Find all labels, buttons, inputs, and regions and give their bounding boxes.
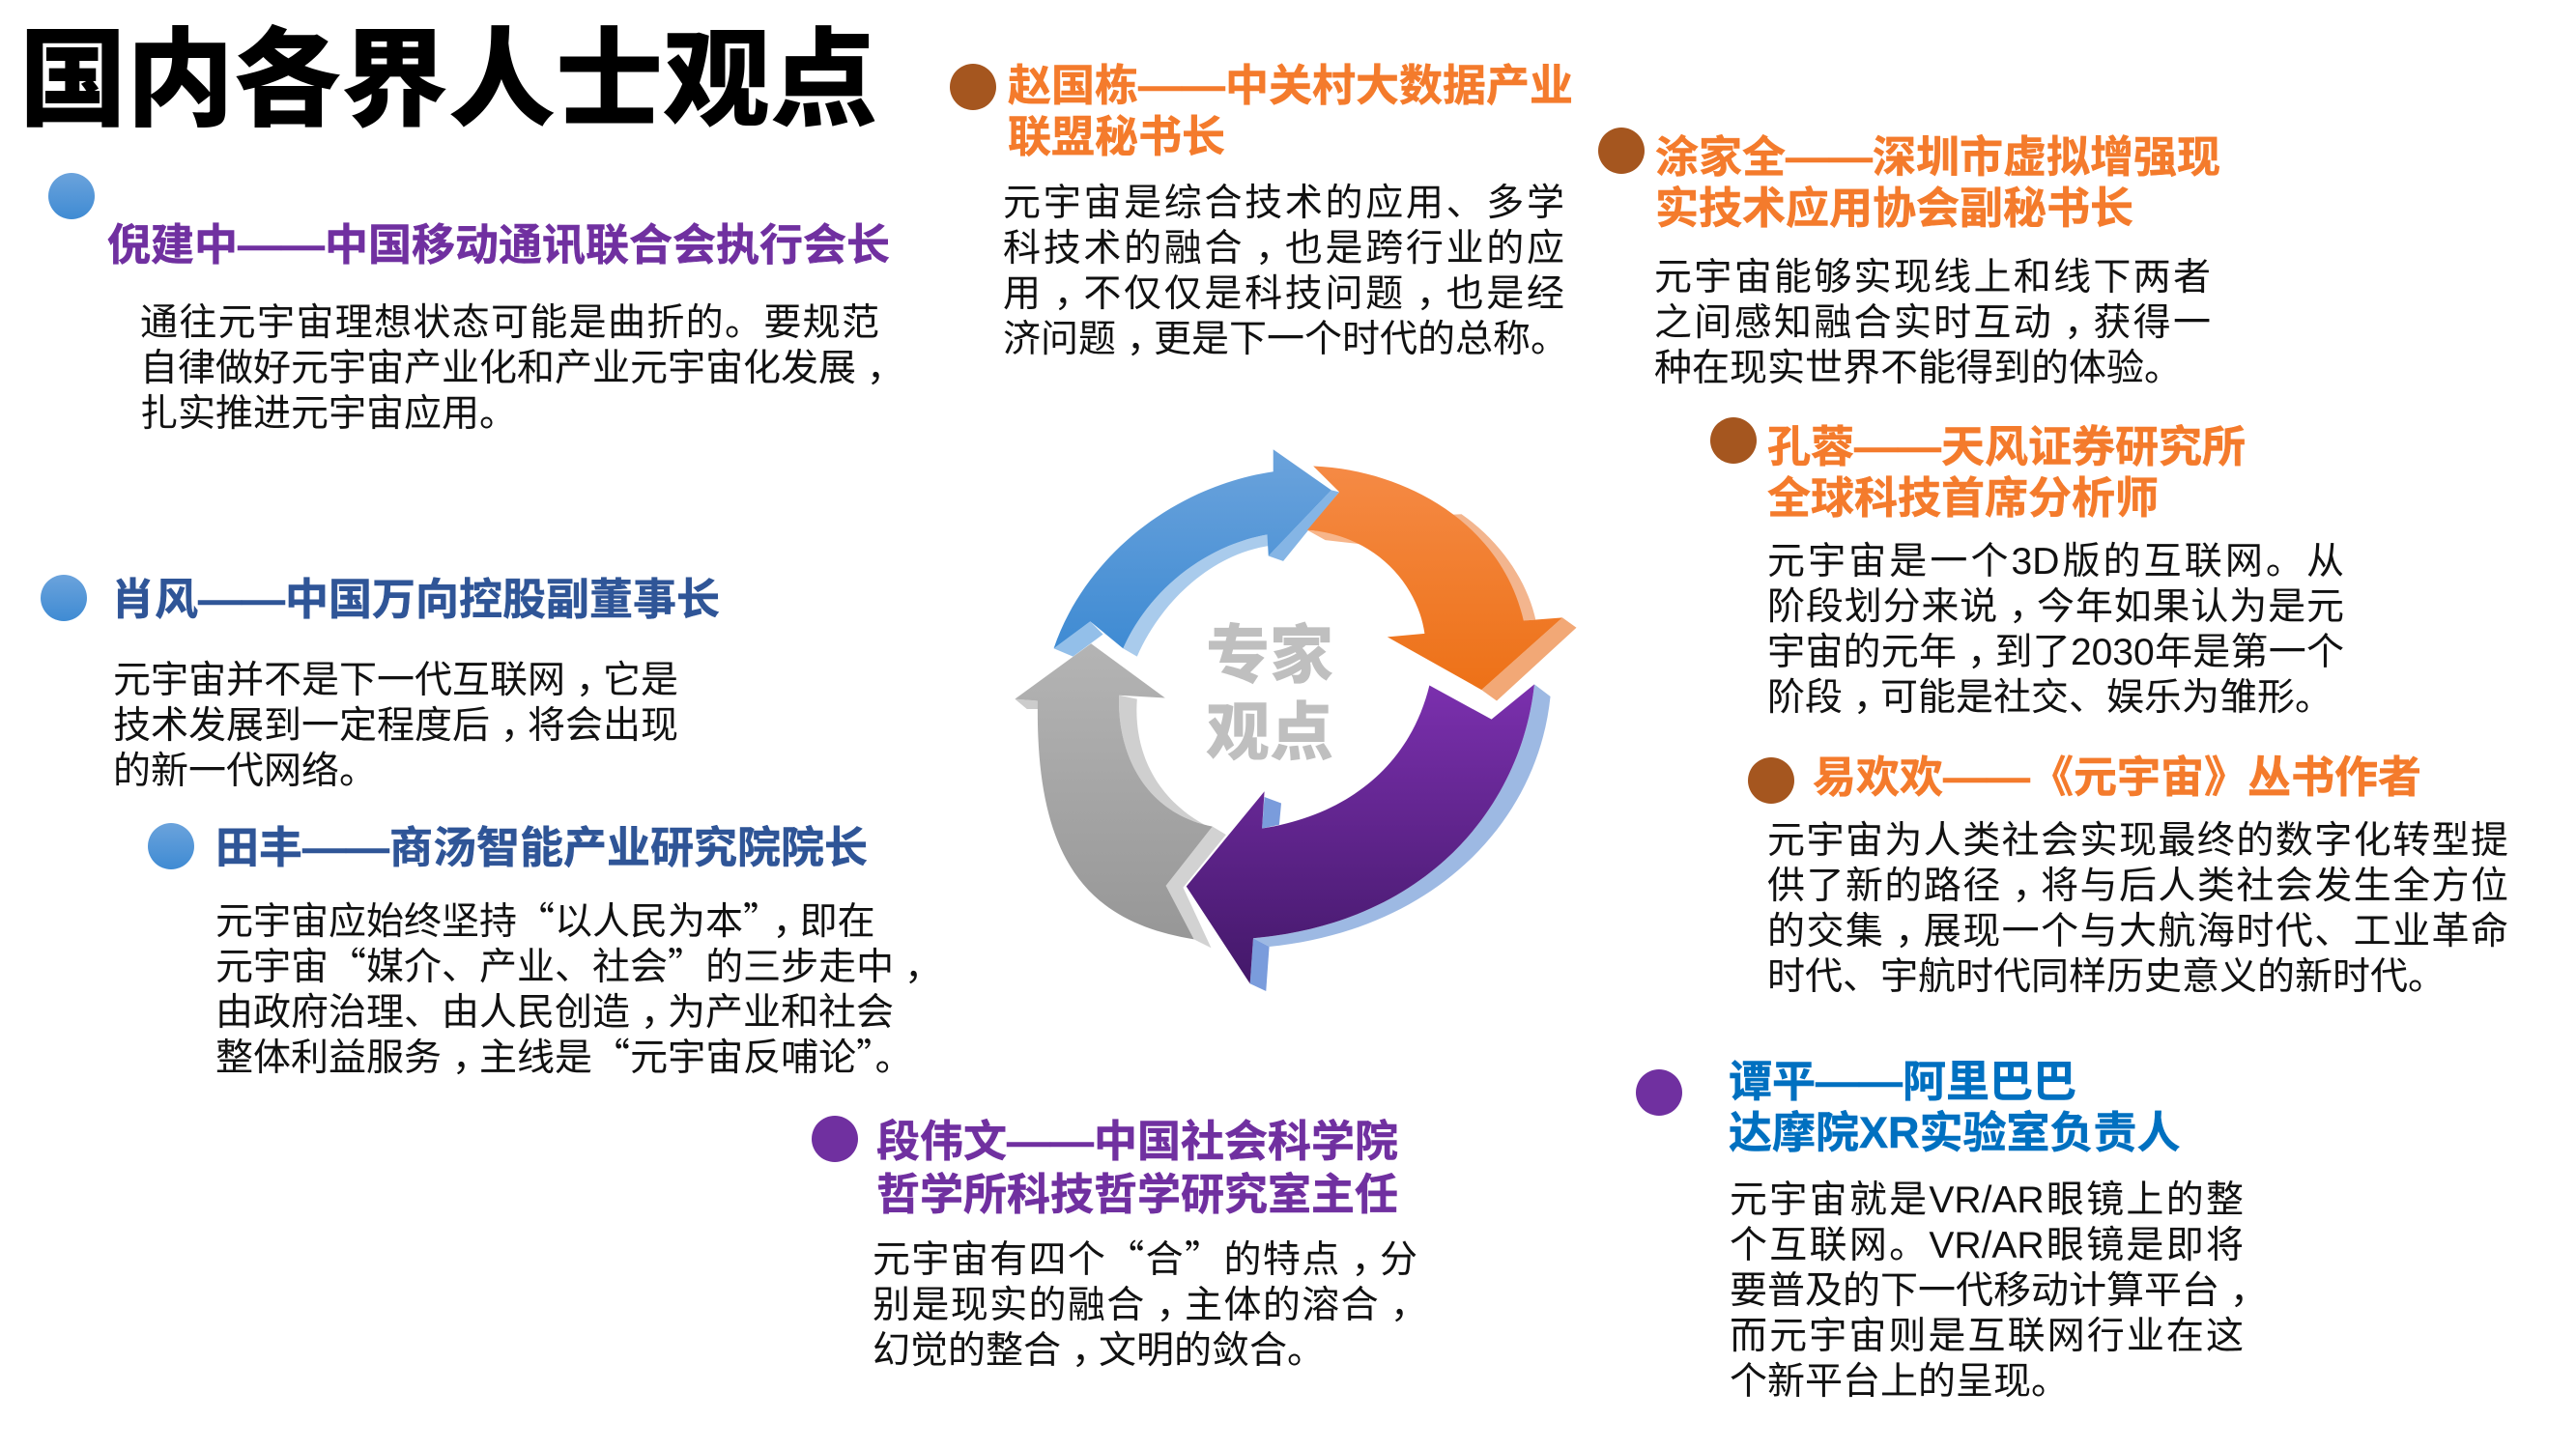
arrow: purple (1187, 684, 1551, 991)
heading: 易欢欢——《元宇宙》丛书作者 (1813, 753, 2421, 802)
body text: 科技术的融合 ，也是跨行业的应 (1003, 228, 1564, 270)
body text: 整体利益服务 ，主线是“元宇宙反哺论”。 (215, 1028, 913, 1082)
body text (215, 892, 942, 1082)
body text: 自律做好元宇宙产业化和产业元宇宙化发展 ， (140, 348, 904, 389)
heading: 孔蓉——天风证券研究所 全球科技首席分析师 (1767, 422, 2246, 523)
panel: 肖风 (41, 575, 720, 792)
body text (140, 302, 904, 435)
body text: 用 ，不仅仅是科技问题 ，也是经 (1003, 273, 1564, 315)
bullet (1710, 417, 1757, 464)
body text: 元宇宙是一个3D版的互联网。从 (1767, 541, 2344, 582)
arrow: orange (1307, 467, 1576, 701)
body text: 宇宙的元年 ，到了2030年是第一个 (1767, 632, 2344, 673)
arrow: blue (1054, 449, 1339, 657)
panel: 段伟文 (812, 1116, 1428, 1372)
body text: 元宇宙并不是下一代互联网 ，它是 (113, 660, 678, 701)
body text: 元宇宙为人类社会实现最终的数字化转型提 (1767, 820, 2508, 862)
panel: 涂家全 (1598, 128, 2220, 389)
panel: 谭平 (1636, 1057, 2268, 1403)
body text: 的新一代网络。 (113, 751, 377, 792)
body text: 由政府治理、由人民创造 ，为产业和社会 (215, 992, 894, 1034)
bullet (1598, 128, 1645, 174)
body text: 时代、宇航时代同样历史意义的新时代。 (1767, 956, 2446, 998)
panel: 孔蓉 (1710, 417, 2344, 719)
body text: 元宇宙应始终坚持“以人民为本” ，即在 (215, 892, 875, 946)
body text: 济问题 ，更是下一个时代的总称。 (1003, 319, 1568, 360)
body text (1730, 1179, 2268, 1403)
heading: 段伟文——中国社会科学院 哲学所科技哲学研究室主任 (876, 1117, 1398, 1219)
body text (873, 1230, 1428, 1372)
body text (1767, 820, 2508, 998)
arrow: grey (1015, 643, 1226, 948)
title: 国内各界人士观点 (19, 20, 877, 140)
body text: 阶段划分来说 ，今年如果认为是元 (1767, 586, 2344, 628)
heading: 赵国栋——中关村大数据产业 联盟秘书长 (1008, 61, 1573, 161)
body text: 个新平台上的呈现。 (1730, 1361, 2069, 1403)
body text: 元宇宙“媒介、产业、社会”的三步走中 ， (215, 937, 942, 991)
body text: 元宇宙就是VR/AR眼镜上的整 (1730, 1179, 2244, 1221)
body text: 个互联网。VR/AR眼镜是即将 (1730, 1225, 2244, 1266)
body text (1003, 183, 1568, 360)
body text: 扎实推进元宇宙应用。 (140, 393, 517, 435)
body text: 种在现实世界不能得到的体验。 (1654, 348, 2182, 389)
body text: 元宇宙有四个“合”的特点 ，分 (873, 1230, 1417, 1284)
bullet (1636, 1069, 1682, 1116)
body text: 别是现实的融合 ，主体的溶合 ， (873, 1285, 1428, 1326)
body text (1767, 541, 2344, 719)
bullet (148, 823, 194, 869)
bullet (1748, 757, 1794, 804)
body text: 元宇宙能够实现线上和线下两者 (1654, 257, 2211, 298)
body text: 元宇宙是综合技术的应用、多学 (1003, 183, 1564, 224)
panel: 田丰 (148, 823, 942, 1082)
centre label: 观点 (1206, 696, 1333, 768)
body text: 阶段 ，可能是社交、娱乐为雏形。 (1767, 677, 2333, 719)
body text: 技术发展到一定程度后 ，将会出现 (113, 705, 678, 747)
body text: 而元宇宙则是互联网行业在这 (1730, 1316, 2244, 1357)
heading: 肖风——中国万向控股副董事长 (111, 575, 720, 624)
body text: 供了新的路径 ，将与后人类社会发生全方位 (1767, 866, 2508, 907)
body text: 的交集 ，展现一个与大航海时代、工业革命 (1767, 911, 2508, 952)
bullet (48, 173, 95, 219)
centre label: 专家 (1206, 619, 1333, 691)
panel: 易欢欢 (1748, 753, 2508, 998)
bullet (950, 64, 996, 110)
body text (113, 660, 678, 792)
bullet (812, 1116, 858, 1162)
heading: 谭平——阿里巴巴 达摩院XR实验室负责人 (1729, 1057, 2181, 1157)
centre label (1206, 619, 1333, 768)
body text: 要普及的下一代移动计算平台 ， (1730, 1270, 2268, 1312)
body text: 通往元宇宙理想状态可能是曲折的。要规范 (140, 302, 879, 344)
panel: 赵国栋 (950, 61, 1573, 360)
heading: 涂家全——深圳市虚拟增强现 实技术应用协会副秘书长 (1655, 132, 2220, 233)
heading: 倪建中——中国移动通讯联合会执行会长 (107, 220, 890, 270)
bullet (41, 575, 87, 621)
body text (1654, 257, 2211, 389)
panel: 倪建中 (48, 173, 904, 435)
body text: 之间感知融合实时互动 ，获得一 (1654, 302, 2211, 344)
body text: 幻觉的整合 ，文明的敛合。 (873, 1330, 1325, 1372)
heading: 田丰——商汤智能产业研究院院长 (215, 823, 868, 872)
